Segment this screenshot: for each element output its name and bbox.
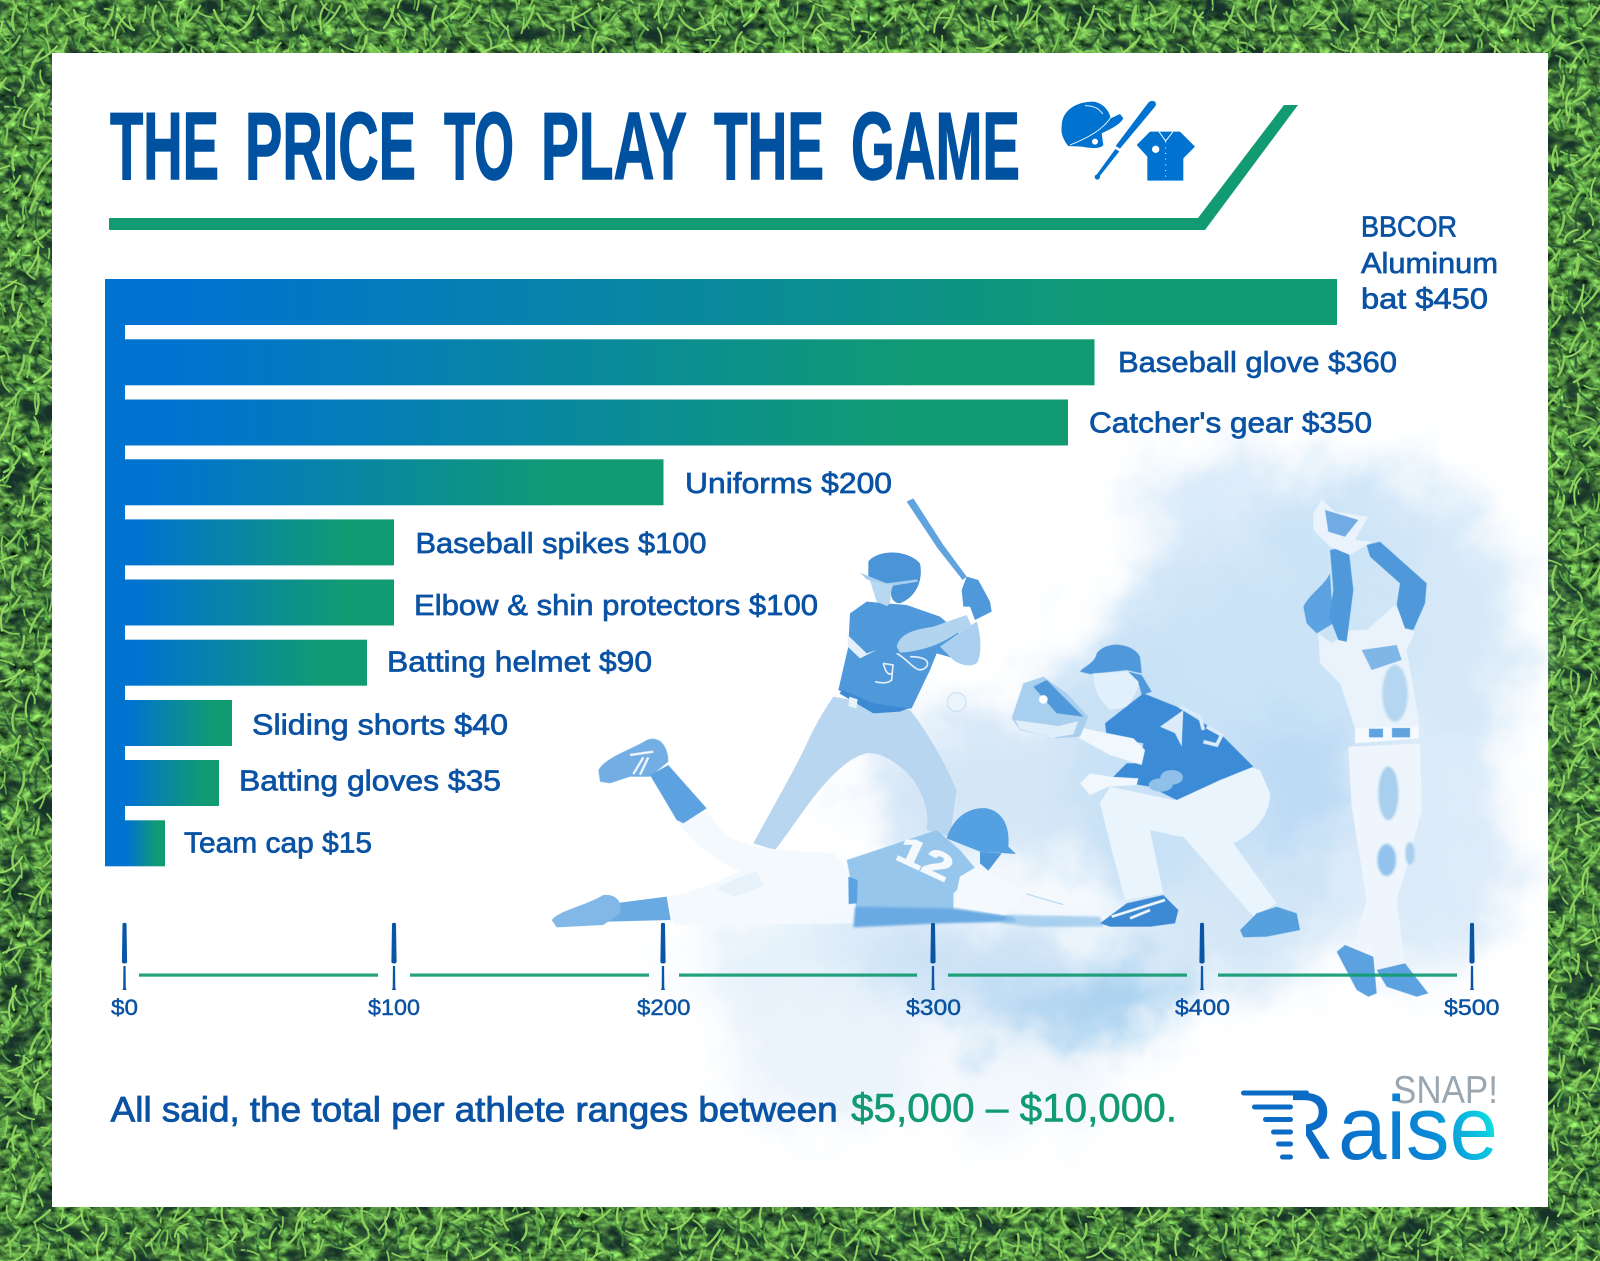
label: elbow and shin protectors: Elbow & shin protectors $100 bbox=[414, 590, 818, 622]
bar: batting gloves bbox=[125, 760, 219, 806]
bar: catcher's gear bbox=[125, 400, 1068, 446]
logo text: Raise bbox=[1293, 1093, 1494, 1160]
icons: helmet, bat, jersey bbox=[1061, 101, 1195, 181]
bar: sliding shorts bbox=[125, 700, 232, 746]
title: THE bbox=[714, 93, 824, 200]
bar: uniforms bbox=[125, 459, 664, 505]
title bbox=[110, 93, 1020, 200]
axis labels bbox=[111, 995, 1500, 1020]
label: batting helmet: Batting helmet $90 bbox=[387, 647, 652, 679]
logo text: Raise: aise bbox=[1338, 1079, 1498, 1179]
icon: bat bbox=[1095, 101, 1156, 180]
label: catcher's gear: Catcher's gear $350 bbox=[1089, 408, 1372, 440]
label: BBCOR bat: BBCOR bbox=[1361, 212, 1457, 244]
jersey number: 12 bbox=[891, 828, 960, 890]
logo text: SNAP!: SNAP! bbox=[1393, 1069, 1498, 1112]
player: batter bbox=[717, 498, 992, 897]
player: first baseman bbox=[1000, 645, 1300, 937]
bar: team cap bbox=[125, 820, 165, 866]
label: baseball glove: Baseball glove $360 bbox=[1118, 347, 1397, 379]
watercolor cloud behind players bbox=[680, 460, 1517, 1135]
axis labels: $500 bbox=[1444, 995, 1500, 1020]
axis ticks: bats bbox=[122, 923, 1475, 990]
logo: Snap! Raise bbox=[1241, 1076, 1495, 1160]
label: baseball spikes: Baseball spikes $100 bbox=[416, 528, 706, 560]
players photo group bbox=[552, 498, 1428, 997]
summary statement: All said, the total per athlete ranges between bbox=[111, 1091, 838, 1130]
bar chart bbox=[105, 279, 1337, 866]
axis labels: $200 bbox=[637, 995, 690, 1020]
bar labels bbox=[184, 212, 1498, 860]
label: sliding shorts: Sliding shorts $40 bbox=[252, 709, 508, 741]
player: outfielder catching bbox=[1303, 499, 1428, 997]
axis labels: $400 bbox=[1175, 995, 1230, 1020]
logo text: Raise: R bbox=[1268, 1073, 1334, 1180]
bar: elbow and shin protectors bbox=[125, 580, 394, 626]
icon: batting helmet bbox=[1061, 102, 1123, 148]
player: sliding runner bbox=[552, 739, 1063, 927]
label: BBCOR bat bbox=[1361, 212, 1498, 316]
label: batting gloves: Batting gloves $35 bbox=[239, 766, 501, 798]
label: BBCOR bat: bat $450 bbox=[1361, 284, 1488, 316]
summary statement: $5,000 – $10,000. bbox=[851, 1087, 1177, 1131]
axis labels: $300 bbox=[906, 995, 961, 1020]
title underline bracket bbox=[109, 105, 1298, 230]
icon: jersey bbox=[1136, 132, 1195, 181]
bar: baseball spikes bbox=[125, 519, 394, 565]
bar: BBCOR bat bbox=[125, 279, 1337, 325]
title: TO bbox=[444, 93, 514, 200]
title: PLAY bbox=[541, 93, 687, 200]
label: team cap: Team cap $15 bbox=[184, 828, 372, 860]
chart spine bbox=[105, 279, 125, 866]
summary statement bbox=[111, 1087, 1177, 1131]
title: THE bbox=[110, 93, 219, 200]
title: PRICE bbox=[245, 93, 416, 200]
price axis bbox=[111, 923, 1500, 1020]
axis segments bbox=[139, 974, 1457, 977]
title: GAME bbox=[851, 93, 1020, 200]
bar: baseball glove bbox=[125, 339, 1094, 385]
label: BBCOR bat: Aluminum bbox=[1361, 248, 1498, 280]
axis labels: $0 bbox=[111, 995, 138, 1020]
axis labels: $100 bbox=[368, 995, 420, 1020]
bar: batting helmet bbox=[125, 640, 367, 686]
logo speed lines bbox=[1241, 1090, 1309, 1160]
label: uniforms: Uniforms $200 bbox=[685, 468, 892, 500]
